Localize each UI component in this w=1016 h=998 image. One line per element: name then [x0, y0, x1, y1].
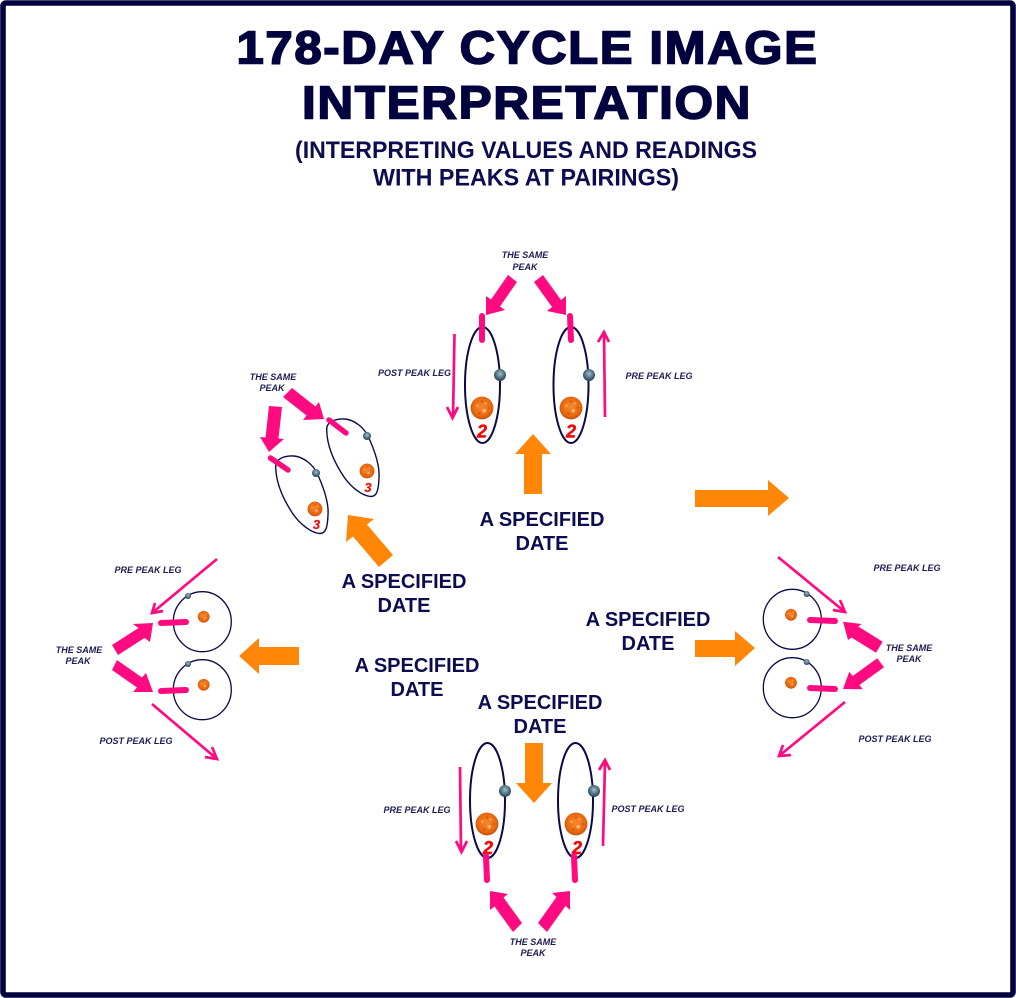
- label: post peak leg: POST PEAK LEG: [99, 736, 173, 746]
- label: post peak leg: POST PEAK LEG: [858, 734, 932, 744]
- label: post peak leg: POST PEAK LEG: [378, 368, 451, 378]
- date arrow up-left: [346, 515, 393, 567]
- right number: 2: [571, 838, 582, 858]
- subtitle: WITH PEAKS AT PAIRINGS): [373, 164, 679, 192]
- left peak arrow: [490, 891, 522, 932]
- lower orbit: [276, 456, 328, 534]
- left peak arrow: [486, 275, 517, 315]
- date label: A SPECIFIED: [478, 692, 602, 714]
- post peak arrow: [447, 334, 458, 418]
- date arrow left: [239, 638, 299, 674]
- date label: A SPECIFIED: [586, 609, 710, 631]
- label: the same peak: THE SAME: [502, 250, 548, 260]
- upper planet: [363, 432, 371, 440]
- right orbit: [558, 743, 593, 858]
- post peak arrow: [599, 760, 610, 846]
- post peak arrow: [779, 702, 845, 756]
- upper sun: [785, 609, 797, 621]
- lower peak marker: [161, 690, 186, 691]
- upper peak arrow: [843, 622, 883, 653]
- right sun: [560, 396, 582, 420]
- lower planet: [312, 469, 320, 477]
- left sun: [476, 812, 498, 836]
- label: the same peak: PEAK: [65, 656, 92, 666]
- left number: 2: [476, 422, 487, 442]
- lower sun: [198, 679, 210, 691]
- date arrow up: [515, 434, 551, 494]
- title: INTERPRETATION: [302, 76, 752, 128]
- left peak marker: [479, 316, 485, 340]
- upper peak marker: [329, 420, 346, 433]
- pre peak arrow: [152, 559, 217, 613]
- label: the same peak: THE SAME: [886, 643, 932, 653]
- right peak marker: [574, 856, 575, 880]
- label: pre peak leg: PRE PEAK LEG: [625, 371, 693, 381]
- date label: DATE: [378, 595, 430, 617]
- upper peak marker: [810, 620, 835, 621]
- date arrow right: [695, 480, 789, 516]
- panel: left pairing: [56, 559, 479, 759]
- right orbit: [554, 327, 588, 443]
- date arrow right: [695, 631, 755, 666]
- label: post peak leg: POST PEAK LEG: [611, 804, 685, 814]
- label: the same peak: PEAK: [259, 383, 286, 393]
- upper planet: [185, 593, 191, 599]
- upper peak marker: [161, 622, 186, 623]
- label: the same peak: THE SAME: [510, 937, 556, 947]
- right peak arrow: [534, 275, 566, 315]
- upper peak arrow: [112, 623, 153, 655]
- label: the same peak: PEAK: [520, 948, 547, 958]
- title: [236, 22, 818, 128]
- label: the same peak: THE SAME: [250, 372, 296, 382]
- upper peak arrow: [283, 388, 324, 420]
- subtitle: [295, 137, 757, 192]
- left peak marker: [486, 856, 487, 880]
- label: pre peak leg: PRE PEAK LEG: [114, 565, 182, 575]
- upper number: 3: [364, 480, 372, 495]
- date label: DATE: [622, 633, 674, 655]
- lower peak marker: [810, 688, 835, 689]
- upper sun: [360, 464, 374, 478]
- right planet: [583, 369, 595, 381]
- right peak marker: [570, 316, 571, 340]
- lower planet: [185, 661, 191, 667]
- date label: DATE: [514, 716, 566, 738]
- label: the same peak: THE SAME: [56, 645, 102, 655]
- right peak arrow: [538, 891, 570, 932]
- lower number: 3: [313, 517, 321, 532]
- upper planet: [804, 591, 810, 597]
- label: pre peak leg: PRE PEAK LEG: [383, 805, 451, 815]
- pre peak arrow: [456, 767, 467, 852]
- panel: right pairing: [586, 557, 941, 756]
- label: the same peak: PEAK: [512, 262, 539, 272]
- lower peak arrow: [112, 660, 153, 692]
- lower peak arrow: [843, 658, 884, 689]
- date arrow down: [516, 743, 552, 803]
- left planet: [499, 785, 511, 797]
- lower sun: [308, 502, 322, 516]
- upper sun: [198, 611, 210, 623]
- panel: tilted pairing: [250, 372, 466, 617]
- date label: A SPECIFIED: [480, 509, 604, 531]
- upper orbit: [173, 592, 231, 652]
- date label: A SPECIFIED: [342, 571, 466, 593]
- title: 178-DAY CYCLE IMAGE: [236, 22, 818, 74]
- left sun: [470, 396, 494, 420]
- panel: top pairing: [378, 250, 789, 555]
- lower orbit: [763, 658, 821, 718]
- date label: A SPECIFIED: [355, 655, 479, 677]
- lower sun: [785, 677, 797, 689]
- lower orbit: [173, 660, 231, 720]
- left number: 2: [482, 838, 493, 858]
- pre peak arrow: [778, 557, 845, 612]
- right number: 2: [565, 422, 576, 442]
- upper orbit: [763, 589, 821, 649]
- date label: DATE: [516, 533, 568, 555]
- post peak arrow: [152, 704, 217, 759]
- left orbit: [470, 743, 505, 858]
- label: the same peak: PEAK: [896, 654, 923, 664]
- upper orbit: [327, 419, 379, 496]
- pre peak arrow: [598, 332, 609, 417]
- left orbit: [465, 327, 500, 443]
- label: pre peak leg: PRE PEAK LEG: [873, 563, 941, 573]
- lower planet: [804, 659, 810, 665]
- lower peak arrow: [260, 406, 284, 452]
- right sun: [564, 812, 588, 836]
- lower peak marker: [270, 458, 288, 470]
- left planet: [494, 369, 506, 381]
- panel: bottom pairing: [383, 692, 685, 958]
- date label: DATE: [391, 679, 443, 701]
- right planet: [588, 785, 600, 797]
- subtitle: (INTERPRETING VALUES AND READINGS: [295, 137, 757, 164]
